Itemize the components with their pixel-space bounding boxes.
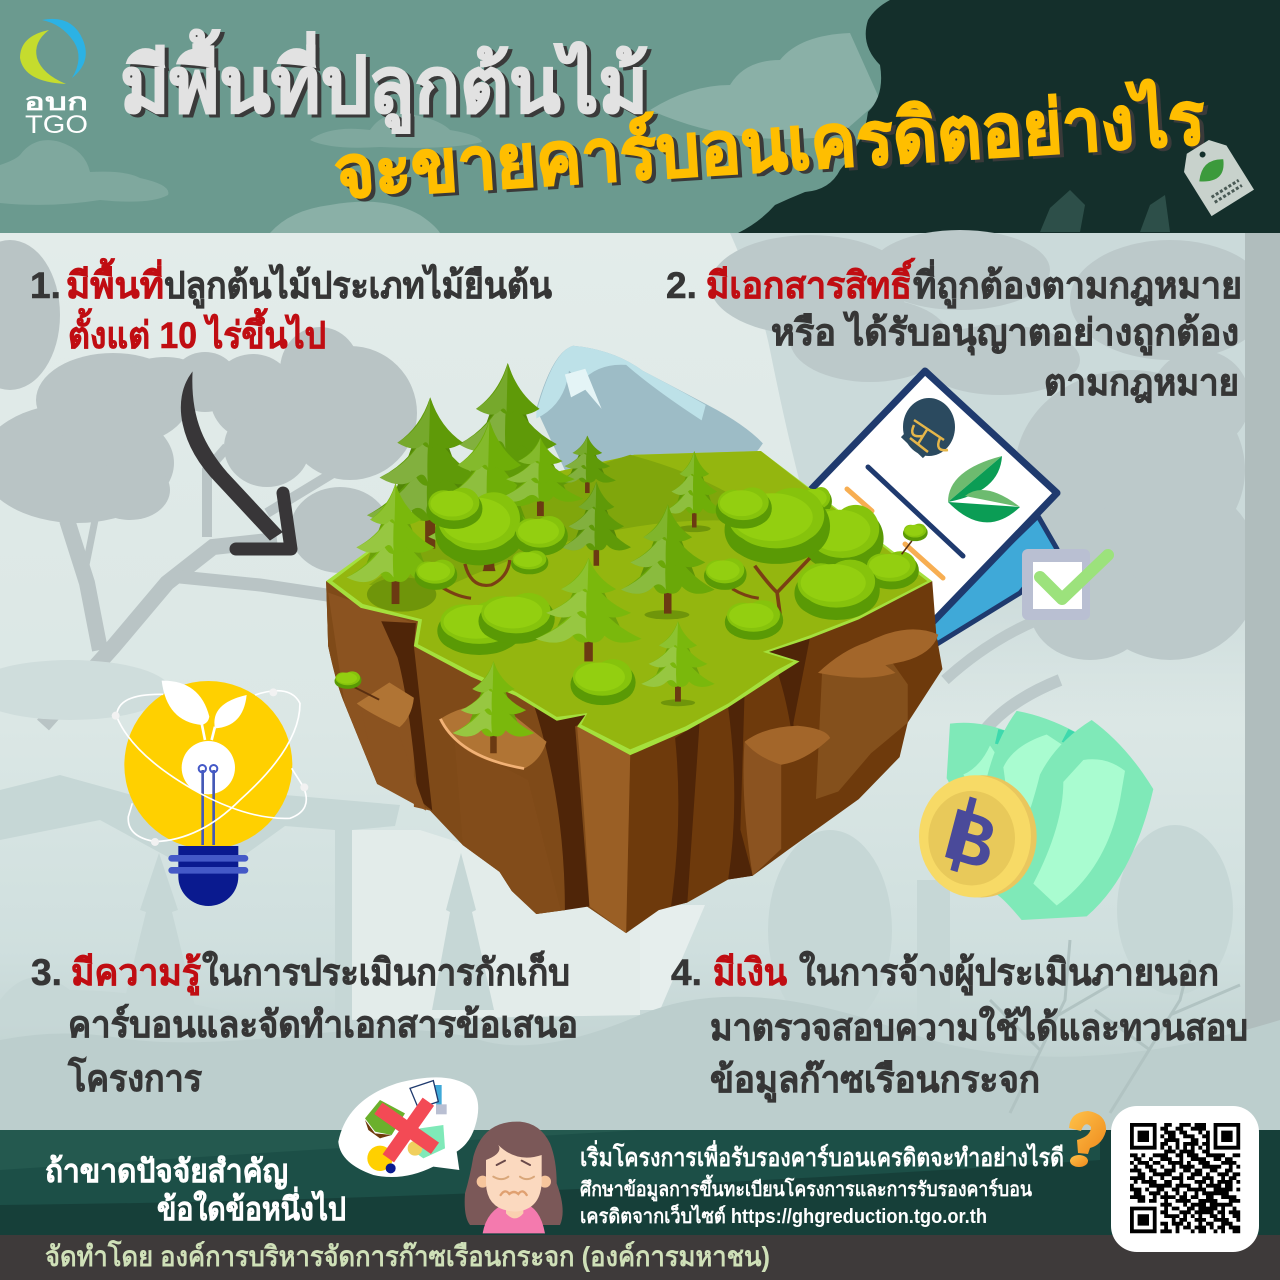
icon: worried woman bbox=[465, 1122, 563, 1233]
arrow bbox=[181, 373, 291, 549]
point 1 text: ปลูกต้นไม้ประเภทไม้ยืนต้น bbox=[164, 263, 552, 309]
point 4 text: มาตรวจสอบความใช้ได้และทวนสอบ bbox=[710, 1005, 1248, 1048]
footer info text bbox=[580, 1140, 1064, 1228]
pine trees bbox=[347, 363, 723, 604]
point 4 text: 4. bbox=[671, 952, 702, 993]
background: header band bbox=[0, 0, 1280, 233]
title line 2: จะขายคาร์บอนเครดิตอย่างไร bbox=[336, 77, 1212, 217]
footer info text: เริ่มโครงการเพื่อรับรองคาร์บอนเครดิตจะทำอย่างไรดี bbox=[580, 1140, 1064, 1172]
footer left callout: ข้อใดข้อหนึ่งไป bbox=[157, 1186, 346, 1227]
point 4 text: ข้อมูลก๊าซเรือนกระจก bbox=[710, 1059, 1040, 1103]
point 1 text: 1. bbox=[30, 265, 61, 306]
footer info text: เครดิตจากเว็บไซต์ https://ghgreduction.tgo.or.th bbox=[580, 1203, 987, 1228]
point 2 text: หรือ ได้รับอนุญาตอย่างถูกต้อง bbox=[771, 310, 1239, 356]
footer: green band bbox=[0, 1130, 1280, 1236]
illustration: light bulb bbox=[112, 681, 308, 906]
QR code bbox=[1111, 1106, 1259, 1252]
round trees bbox=[415, 487, 919, 640]
footer: bottom strip bbox=[0, 1235, 1280, 1280]
background: upper right tree silhouette bbox=[710, 230, 1280, 1131]
point 4 text: มีเงิน bbox=[713, 952, 787, 993]
checkbox bbox=[1022, 549, 1108, 620]
title line 1: มีพื้นที่ปลูกต้นไม้ bbox=[124, 32, 652, 137]
title line 2: จะขายคาร์บอนเครดิตอย่างไร bbox=[332, 74, 1208, 214]
rock body bbox=[326, 581, 942, 933]
point 2 text: มีเอกสารสิทธิ์ bbox=[706, 258, 916, 306]
point 2 text: ตามกฎหมาย bbox=[1044, 362, 1239, 403]
coin baht sign: B bbox=[937, 792, 1005, 886]
icon: scales of justice bbox=[903, 398, 955, 456]
title line 1: มีพื้นที่ปลูกต้นไม้ bbox=[120, 29, 648, 134]
point 3 text: ในการประเมินการกักเก็บ bbox=[202, 949, 570, 993]
point 2 text: 2. bbox=[666, 265, 697, 306]
point 1 text: ตั้งแต่ 10 ไร่ขึ้นไป bbox=[68, 308, 326, 356]
illustration: document with checkbox bbox=[798, 371, 1108, 644]
point 3 text bbox=[31, 949, 578, 1099]
logo: อบก TGO: อบก bbox=[24, 89, 88, 116]
illustration: mountain bbox=[536, 346, 763, 470]
background: light rays bbox=[348, 830, 705, 1020]
background: lower silhouettes bbox=[0, 660, 1233, 1060]
point 3 text: คาร์บอนและจัดทำเอกสารข้อเสนอ bbox=[68, 1004, 578, 1045]
point 2 text: ที่ถูกต้องตามกฎหมาย bbox=[913, 259, 1242, 309]
logo: อบก TGO: TGO bbox=[25, 111, 88, 139]
mid pines and bushes bbox=[335, 505, 928, 753]
illustration: money and coin bbox=[919, 711, 1153, 920]
point 2 text bbox=[666, 258, 1242, 403]
footer info text: ศึกษาข้อมูลการขึ้นทะเบียนโครงการและการรับรองคาร์บอน bbox=[580, 1174, 1032, 1203]
grass top bbox=[326, 451, 932, 755]
footer left callout: ถ้าขาดปัจจัยสำคัญ bbox=[45, 1153, 288, 1190]
logo: อบก TGO bbox=[20, 19, 88, 139]
point 4 text bbox=[671, 950, 1248, 1103]
rock ledges bbox=[357, 629, 938, 769]
icon: price tag bbox=[1177, 134, 1254, 216]
background: foreground fronds bbox=[990, 940, 1240, 1113]
point 1 text: มีพื้นที่ bbox=[66, 258, 164, 306]
icon: question mark bbox=[1069, 1111, 1106, 1167]
speech bubble with crossed icons bbox=[338, 1077, 478, 1177]
point 3 text: โครงการ bbox=[67, 1056, 202, 1099]
illustration: floating island bbox=[326, 363, 942, 933]
point 3 text: 3. bbox=[31, 952, 62, 993]
footer credit: จัดทำโดย องค์การบริหารจัดการก๊าซเรือนกระจก (องค์การมหาชน) bbox=[45, 1239, 770, 1272]
background: content area bbox=[0, 233, 1280, 1131]
point 4 text: ในการจ้างผู้ประเมินภายนอก bbox=[799, 950, 1219, 996]
point 1 text bbox=[30, 258, 552, 356]
background: dark tree crown bbox=[738, 0, 1280, 233]
icon: leaf logo bbox=[948, 456, 1020, 522]
background: left tree silhouette bbox=[0, 240, 417, 725]
footer left callout bbox=[45, 1153, 346, 1227]
point 3 text: มีความรู้ bbox=[71, 952, 201, 996]
background: ground band bbox=[0, 997, 1280, 1131]
